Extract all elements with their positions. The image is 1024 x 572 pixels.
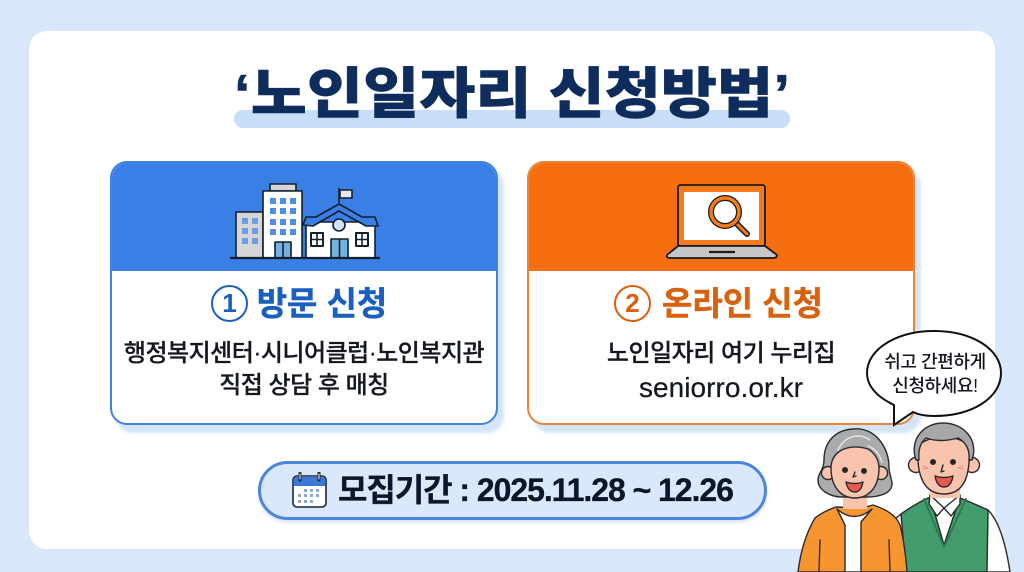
panel header: orange	[527, 161, 915, 271]
number badge 1	[211, 285, 248, 322]
woman	[798, 429, 907, 572]
bubble text line 2: 신청하세요!	[892, 376, 978, 396]
panel: visit application	[110, 161, 498, 425]
panel header: blue	[110, 161, 498, 271]
title highlight bar	[234, 110, 790, 128]
panel: online application	[527, 161, 915, 425]
bubble text line 1: 쉬고 간편하게	[884, 352, 986, 372]
number badge 2	[614, 285, 651, 322]
heading: visit application: 방문 신청	[257, 285, 387, 322]
icon: laptop with magnifier	[666, 184, 778, 259]
illustration: senior couple	[797, 422, 1011, 572]
text: recruitment period: 모집기간 : 2025.11.28 ~ 12.26	[338, 472, 733, 508]
number badge 1: 1	[222, 288, 237, 318]
man	[895, 423, 1010, 572]
heading: online application: 온라인 신청	[662, 285, 823, 322]
text: website address: seniorro.or.kr	[639, 372, 803, 403]
number badge 2: 2	[625, 288, 640, 318]
speech bubble	[866, 330, 1002, 427]
panel: recruitment period pill	[258, 461, 767, 520]
text: visit counselling: 직접 상담 후 매칭	[219, 372, 389, 399]
text: online site name: 노인일자리 여기 누리집	[607, 340, 835, 367]
text: visit places: 행정복지센터·시니어클럽·노인복지관	[124, 340, 484, 367]
title: ‘노인일자리 신청방법’	[234, 63, 790, 125]
icon: calendar	[292, 472, 327, 508]
icon: buildings	[230, 183, 380, 260]
